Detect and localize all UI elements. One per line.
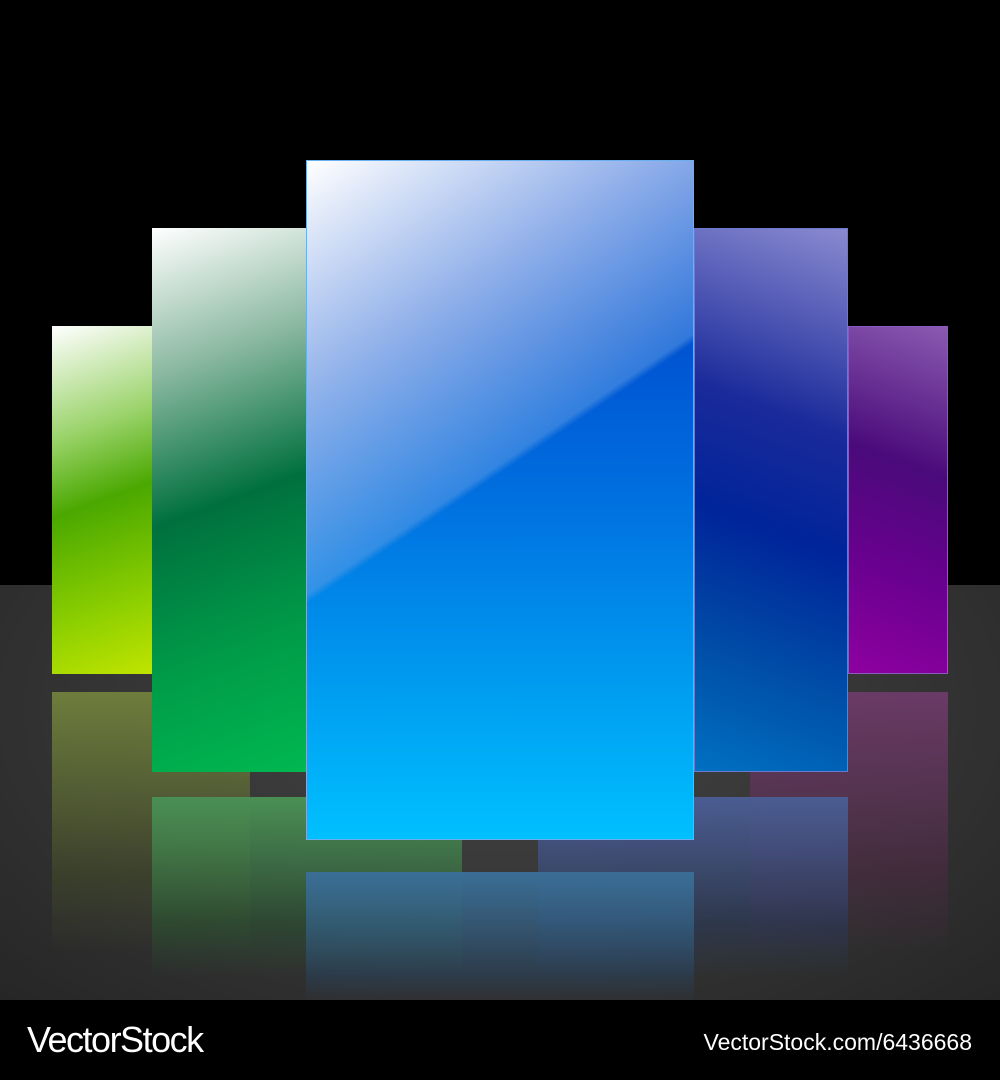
panel: green: [152, 228, 306, 772]
reflection: far right: [750, 692, 948, 952]
panel: right blue: [694, 228, 848, 772]
reflection: right blue: [538, 797, 848, 977]
panel: far left yellow-green: [52, 326, 152, 674]
reflection: far left: [52, 692, 250, 952]
panel: center blue: [306, 160, 694, 840]
reflection: green: [152, 797, 462, 977]
reflection: center blue: [306, 872, 694, 1000]
floor: [0, 585, 1000, 1000]
panel: far right purple: [848, 326, 948, 674]
footer: url: VectorStock.com/6436668: [704, 1029, 972, 1055]
footer: brand: VectorStock: [27, 1019, 203, 1060]
